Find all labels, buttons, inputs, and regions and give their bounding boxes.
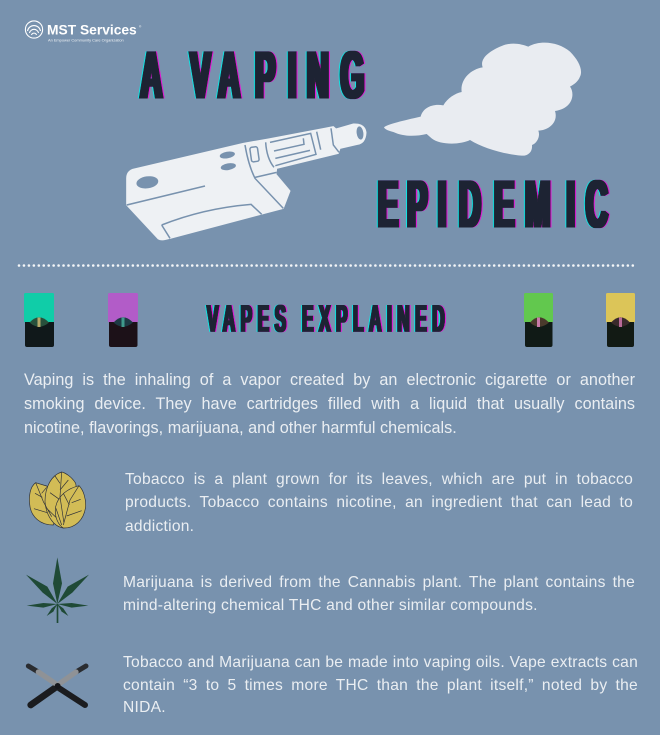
intro paragraph <box>24 371 635 437</box>
icon: crossed vape pens <box>28 666 86 705</box>
icon: vape mod device <box>127 124 366 240</box>
text: tobacco <box>125 471 633 535</box>
logo: MST Services: MST Services <box>47 22 137 38</box>
text: tobacco: addiction. <box>125 518 194 535</box>
icon: marijuana leaf <box>26 557 89 623</box>
text: marijuana <box>123 574 635 614</box>
text: tobacco: products. Tobacco contains nicotine, an ingredient that can lead to <box>125 494 633 511</box>
icon: yellow pod <box>606 293 635 347</box>
icon: green pod <box>524 293 553 347</box>
text: vaping oils <box>123 654 638 716</box>
text: marijuana: Marijuana is derived from the Cannabis plant. The plant contains the <box>123 574 635 591</box>
intro paragraph: nicotine, flavorings, marijuana, and other harmful chemicals. <box>24 419 457 437</box>
dotted divider <box>19 264 636 267</box>
logo: MST Services <box>25 21 142 42</box>
icon: tobacco leaves <box>29 472 86 528</box>
text: vaping oils: contain “3 to 5 times more THC than the plant itself,” noted by the <box>123 677 638 694</box>
intro paragraph: Vaping is the inhaling of a vapor created by an electronic cigarette or another <box>24 371 635 389</box>
logo: MST Services: ® <box>139 24 142 28</box>
icon: purple pod <box>108 293 138 347</box>
text: vaping oils: NIDA. <box>123 699 166 716</box>
heading: VAPES EXPLAINED: VAPES EXPLAINED <box>207 298 445 340</box>
title: EPIDEMIC: EPIDEMIC <box>378 167 608 242</box>
icon: smoke cloud <box>384 43 581 156</box>
intro paragraph: smoking device. They have cartridges filled with a liquid that usually contains <box>24 395 635 413</box>
icon: teal pod <box>24 293 54 347</box>
text: tobacco: Tobacco is a plant grown for its leaves, which are put in tobacco <box>125 471 633 488</box>
title: A VAPING: AVAPING <box>140 38 364 113</box>
text: vaping oils: Tobacco and Marijuana can be made into vaping oils. Vape extracts can <box>123 654 638 671</box>
text: marijuana: mind-altering chemical THC and other similar compounds. <box>123 597 538 614</box>
logo: MST Services: An Empower Community Care Organization <box>48 38 124 42</box>
